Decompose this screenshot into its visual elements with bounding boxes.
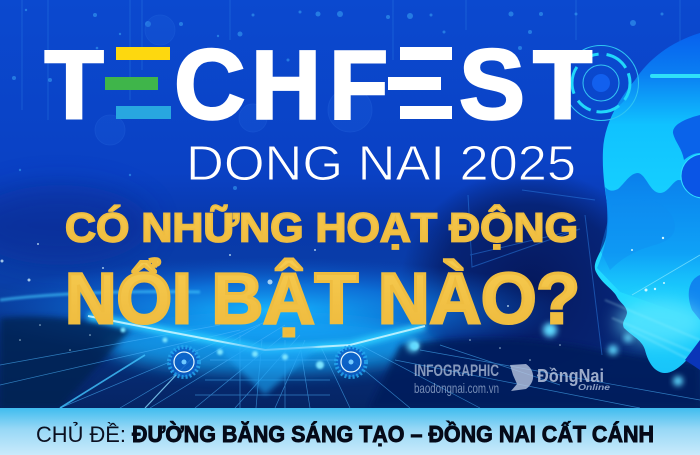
logo: Dong Nai Online: ĐồngNai [537, 366, 604, 386]
dark lobe [673, 115, 700, 160]
watermark: infographic source: INFOGRAPHIC [414, 361, 499, 380]
bottom theme band [0, 408, 700, 455]
right engine [336, 347, 366, 377]
subtitle: DONG NAI 2025: DONG NAI 2025 [186, 137, 576, 191]
headline line 1: CÓ NHỮNG HOẠT ĐỘNG [65, 204, 578, 250]
AI head silhouette [595, 33, 700, 373]
title: TECHFEST: S [459, 28, 525, 140]
title: TECHFEST [44, 28, 592, 140]
watermark: infographic source [414, 361, 499, 396]
lower face shade [597, 173, 700, 320]
icon: newspaper flag [510, 364, 533, 391]
logo: Dong Nai Online: Online [578, 382, 610, 392]
logo: Dong Nai Online [510, 364, 610, 392]
title: TECHFEST: T [44, 30, 104, 140]
target circle icon [564, 46, 638, 120]
title: TECHFEST: H [251, 30, 321, 140]
logo bars: first E [105, 47, 171, 119]
title: TECHFEST: F [329, 30, 388, 140]
left engine [169, 347, 199, 377]
ear ring [681, 154, 700, 198]
theme label: CHỦ ĐỀ: [36, 422, 126, 447]
headline line 2: NỔI BẬT NÀO? [65, 259, 580, 339]
theme text: ĐƯỜNG BĂNG SÁNG TẠO – ĐỒNG NAI CẤT CÁNH [132, 420, 654, 447]
glowing airplane [88, 316, 683, 395]
white bars: second E [388, 47, 452, 119]
watermark: infographic source: baodongnai.com.vn [414, 380, 499, 396]
title: TECHFEST: T [533, 30, 592, 140]
title: TECHFEST: C [174, 28, 246, 140]
